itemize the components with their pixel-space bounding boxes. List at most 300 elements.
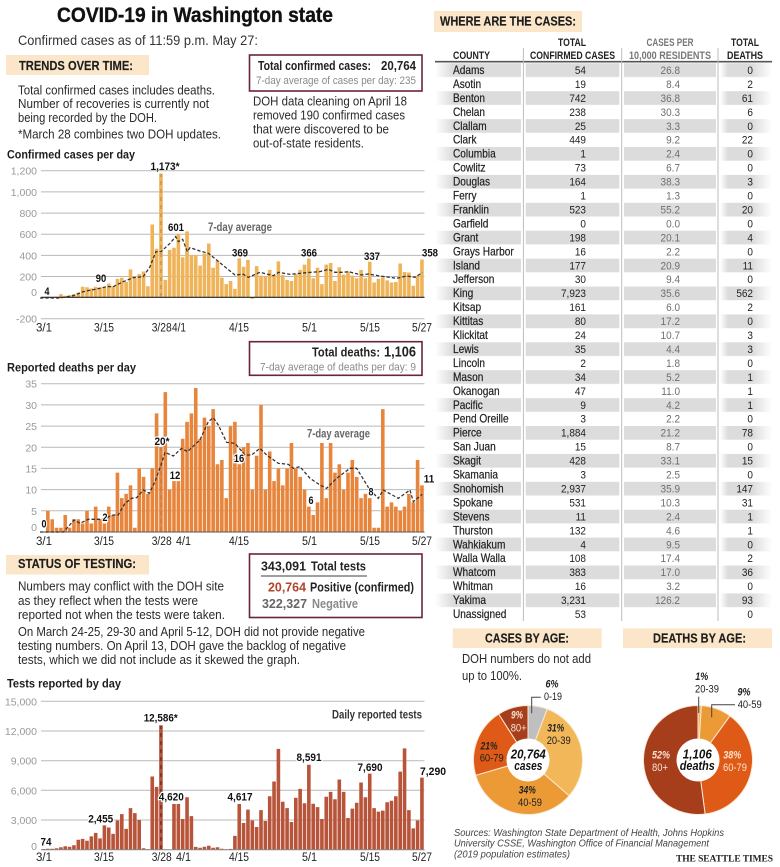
column: cases per 10,000 residents: 35.9 xyxy=(661,483,680,496)
callout: total confirmed cases: 7-day average of cases per day: 235 xyxy=(256,75,416,87)
text block: testing notes: reported not when the tests were taken. xyxy=(18,608,225,622)
column: total confirmed cases: 53 xyxy=(575,608,586,621)
title: COVID-19 in Washington state xyxy=(57,4,333,27)
bar chart: tests reported by day: 12,000 xyxy=(5,726,37,738)
column: county names: Unassigned xyxy=(453,608,506,621)
column: cases per 10,000 residents: 126.2 xyxy=(655,594,680,607)
column: county names: Skamania xyxy=(453,469,499,482)
x axis: tests dates: 4/1 xyxy=(176,852,191,864)
x axis: deaths dates: 3/15 xyxy=(94,536,114,548)
column: cases per 10,000 residents: 17.0 xyxy=(661,567,680,579)
text block: trends notes: *March 28 combines two DOH updates. xyxy=(18,128,221,142)
callout: testing totals: Total tests xyxy=(311,560,366,574)
x axis: tests dates: 5/15 xyxy=(360,852,380,864)
column: county names: Lewis xyxy=(453,343,479,356)
text block: DOH data cleaning note: removed 190 confirmed cases xyxy=(253,109,405,123)
column: county names: Yakima xyxy=(453,595,487,607)
column: county names: King xyxy=(453,288,473,300)
section heading: cases by age: CASES BY AGE: xyxy=(485,630,569,645)
column: total confirmed cases xyxy=(561,64,586,621)
donut chart: deaths by age: 80+ xyxy=(652,762,668,774)
bar chart: reported deaths per day: 0 xyxy=(31,522,37,534)
column: total deaths: 0 xyxy=(747,413,753,426)
donut chart: deaths by age: 40-59 xyxy=(738,699,762,711)
bar chart: reported deaths per day: 20 xyxy=(25,442,37,454)
value labels: cases: 337 xyxy=(364,251,380,263)
column: county names: Franklin xyxy=(453,204,489,217)
bar chart: confirmed cases per day xyxy=(11,161,438,335)
bar chart: tests reported by day: 9,000 xyxy=(11,756,37,768)
column: total deaths: 3 xyxy=(747,343,753,356)
column: county names: Pend Oreille xyxy=(453,413,509,426)
column: total deaths: 3 xyxy=(747,329,753,342)
column: county names: Grays Harbor xyxy=(453,246,514,259)
x axis: cases dates: 3/1 xyxy=(36,323,52,335)
annotation: 7-day average: 7-day average xyxy=(208,222,272,234)
column: total confirmed cases: 0 xyxy=(580,218,586,231)
donut chart: cases by age: 20,764 xyxy=(510,747,546,761)
column: county names: Kittitas xyxy=(453,316,484,328)
bar chart: confirmed cases per day: 1,000 xyxy=(11,187,37,199)
column: county names: Klickitat xyxy=(453,329,488,342)
bars: daily deaths xyxy=(42,388,424,532)
donut chart: deaths by age: 9% xyxy=(738,687,751,699)
table header: TOTAL xyxy=(558,37,586,49)
callout: total deaths: 1,106 xyxy=(384,345,416,361)
section heading: status of testing: STATUS OF TESTING: xyxy=(18,556,136,571)
column: cases per 10,000 residents: 2.2 xyxy=(666,413,680,426)
column: total confirmed cases: 108 xyxy=(569,553,586,565)
column: total deaths: 1 xyxy=(747,385,753,398)
column: total confirmed cases: 449 xyxy=(569,134,586,147)
donut chart: deaths by age: 1,106 xyxy=(683,747,713,761)
column: county names: Jefferson xyxy=(453,274,494,286)
x axis: deaths dates: 5/15 xyxy=(360,536,380,548)
callout: total confirmed cases: 20,764 xyxy=(381,59,416,73)
text block: testing notes: Numbers may conflict with the DOH site xyxy=(18,580,224,594)
column: county names: Clark xyxy=(453,134,477,147)
bars: daily confirmed cases xyxy=(42,174,424,299)
column: total deaths: 0 xyxy=(747,581,753,593)
value labels: deaths: 0 xyxy=(42,519,46,531)
table header: 10,000 RESIDENTS xyxy=(629,50,711,62)
column: county names: San Juan xyxy=(453,441,496,454)
text block: trends notes: being recorded by the DOH. xyxy=(18,111,157,125)
column: cases per 10,000 residents: 38.3 xyxy=(661,176,680,189)
section heading: trends over time xyxy=(6,55,149,75)
text block: testing notes: On March 24-25, 29-30 and April 5-12, DOH did not provide negative xyxy=(18,625,365,639)
column: total deaths: 22 xyxy=(742,134,753,147)
column: total deaths: 1 xyxy=(747,371,753,384)
column: total deaths: 147 xyxy=(736,483,753,496)
text block: DOH data cleaning note: that were discovered to be xyxy=(253,123,389,137)
table header: CASES PER xyxy=(646,37,694,49)
column: total confirmed cases: 24 xyxy=(575,329,586,342)
donut chart: cases by age: 31% xyxy=(547,723,564,735)
value labels: cases: 369 xyxy=(232,248,248,260)
x axis: tests dates: 3/15 xyxy=(94,852,114,864)
value labels: cases xyxy=(44,161,438,298)
column: county names: Mason xyxy=(453,371,483,384)
column: total confirmed cases: 3 xyxy=(580,413,586,426)
column: cases per 10,000 residents: 20.9 xyxy=(661,260,680,273)
value labels: cases: 90 xyxy=(96,273,106,285)
column: total deaths: 11 xyxy=(743,260,753,273)
column: cases per 10,000 residents: 1.3 xyxy=(666,190,680,203)
bar chart: confirmed cases per day: 800 xyxy=(19,208,37,220)
column: total deaths: 0 xyxy=(747,148,753,161)
column: total deaths: 4 xyxy=(747,232,753,245)
column: total confirmed cases: 7,923 xyxy=(561,288,586,300)
x axis: tests dates: 5/27 xyxy=(412,852,432,864)
x axis: deaths dates xyxy=(36,536,432,548)
value labels: tests xyxy=(40,712,446,849)
bar chart: tests reported by day: 0 xyxy=(31,841,37,853)
column: total deaths: 0 xyxy=(747,441,753,454)
callout: total confirmed cases: Total confirmed cases: xyxy=(258,59,371,73)
value labels: deaths: 12 xyxy=(170,470,180,482)
column: total deaths: 93 xyxy=(742,594,753,607)
column: total deaths: 61 xyxy=(742,92,753,105)
column: cases per 10,000 residents: 5.2 xyxy=(666,371,680,384)
x axis: tests dates xyxy=(36,852,432,864)
column: cases per 10,000 residents: 3.2 xyxy=(666,581,680,593)
section heading: cases by age xyxy=(453,628,602,648)
column: cases per 10,000 residents: 55.2 xyxy=(661,204,680,217)
column: county names: Asotin xyxy=(453,78,481,91)
callout: total confirmed cases xyxy=(250,55,422,91)
credit: The Seattle Times: THE SEATTLE TIMES xyxy=(676,855,773,865)
text block: trends notes xyxy=(18,83,221,142)
column: total confirmed cases: 161 xyxy=(569,302,586,314)
table: cases by county xyxy=(435,37,772,621)
x axis: deaths dates: 3/28 xyxy=(152,536,172,548)
value labels: deaths: 11 xyxy=(424,474,434,486)
bar chart: reported deaths per day xyxy=(25,379,434,548)
bar chart: confirmed cases per day: 0 xyxy=(31,287,37,299)
column: county names: Island xyxy=(453,260,480,272)
column: county names: Okanogan xyxy=(453,385,500,398)
section heading: status of testing xyxy=(6,555,149,574)
value labels: tests: 4,620 xyxy=(159,792,184,804)
column: county names: Adams xyxy=(453,64,485,77)
column: total deaths xyxy=(736,64,753,621)
column: total deaths: 1 xyxy=(747,511,753,524)
column: county names: Walla Walla xyxy=(453,553,507,565)
text block: trends notes: Total confirmed cases includes deaths. xyxy=(18,83,215,97)
column: total deaths: 78 xyxy=(742,427,753,440)
column: county names: Douglas xyxy=(453,176,491,189)
x axis: deaths dates: 4/1 xyxy=(176,536,191,548)
column: cases per 10,000 residents: 2.5 xyxy=(666,469,680,482)
donut chart: cases by age: 80+ xyxy=(511,722,527,734)
callout: total deaths: Total deaths: xyxy=(312,346,380,360)
x axis: tests dates: 4/15 xyxy=(229,852,249,864)
bar chart: confirmed cases per day: -200 xyxy=(16,314,37,326)
x axis: tests dates: 5/1 xyxy=(302,852,317,864)
value labels: tests: 74 xyxy=(40,837,52,849)
column: county names: Columbia xyxy=(453,148,497,161)
chart heading: tests reported by day: Tests reported by day xyxy=(7,677,121,691)
column: county names: Lincoln xyxy=(453,357,485,370)
column: total confirmed cases: 15 xyxy=(575,441,586,454)
column: total deaths: 0 xyxy=(747,162,753,175)
column: total confirmed cases: 54 xyxy=(575,64,586,77)
column: cases per 10,000 residents: 26.8 xyxy=(661,64,680,77)
value labels: tests: 12,586* xyxy=(144,712,178,724)
table header xyxy=(435,37,772,621)
column: county names: Kitsap xyxy=(453,302,481,314)
column: total confirmed cases: 164 xyxy=(569,176,586,189)
column: total deaths: 0 xyxy=(747,274,753,286)
column: total deaths: 36 xyxy=(742,567,753,579)
column: cases per 10,000 residents: 6.7 xyxy=(666,162,680,175)
donut chart: cases by age: 9% xyxy=(511,710,523,722)
column: county names: Snohomish xyxy=(453,483,504,496)
text block: DOH data cleaning note: out-of-state residents. xyxy=(253,137,364,151)
column: total confirmed cases: 3,231 xyxy=(561,594,586,607)
value labels: tests: 7,290 xyxy=(420,766,446,778)
column: total confirmed cases: 198 xyxy=(569,232,586,245)
donut chart: deaths by age xyxy=(643,671,762,814)
column: cases per 10,000 residents: 4.4 xyxy=(666,343,680,356)
column: total deaths: 2 xyxy=(747,553,753,565)
x axis: cases dates: 5/1 xyxy=(302,323,317,335)
x axis: deaths dates: 5/27 xyxy=(412,536,432,548)
value labels: cases: 1,173* xyxy=(150,161,180,173)
column: total deaths: 6 xyxy=(747,106,753,119)
column: cases per 10,000 residents: 8.4 xyxy=(666,78,680,91)
column: total confirmed cases: 238 xyxy=(569,106,586,119)
donut chart: cases by age: 40-59 xyxy=(518,797,542,809)
column: total deaths: 0 xyxy=(747,120,753,133)
text block: sources: (2019 population estimates) xyxy=(454,848,570,860)
x axis: cases dates: 4/15 xyxy=(229,323,249,335)
x axis: tests dates: 3/28 xyxy=(152,852,172,864)
donut chart: deaths by age: 20-39 xyxy=(695,684,719,696)
bar chart: tests reported by day xyxy=(5,696,446,864)
column: total confirmed cases: 35 xyxy=(575,343,586,356)
column: cases per 10,000 residents: 17.2 xyxy=(661,315,680,328)
annotation: daily reported tests: Daily reported tests xyxy=(332,709,422,721)
x axis: cases dates: 5/15 xyxy=(360,323,380,335)
donut chart: cases by age: 20-39 xyxy=(547,735,571,747)
column: total confirmed cases: 9 xyxy=(580,399,586,412)
donut chart: deaths by age: 52% xyxy=(652,749,670,761)
column: cases per 10,000 residents: 0.0 xyxy=(666,218,680,231)
callout: testing totals: 20,764 xyxy=(268,581,306,595)
bar chart: reported deaths per day: 30 xyxy=(25,400,37,412)
donut chart: deaths by age: 1% xyxy=(695,671,708,683)
bar chart: tests reported by day: 3,000 xyxy=(11,815,37,827)
column: total deaths: 31 xyxy=(742,497,753,510)
value labels: cases: 358 xyxy=(422,248,438,260)
column: total confirmed cases: 1 xyxy=(580,148,586,161)
donut chart: cases by age: 0-19 xyxy=(544,691,562,703)
column: cases per 10,000 residents: 17.4 xyxy=(661,553,680,565)
column: county names: Cowlitz xyxy=(453,162,486,175)
callout: testing totals: 322,327 xyxy=(262,597,307,611)
column: total confirmed cases: 531 xyxy=(569,497,586,510)
column: cases per 10,000 residents: 9.4 xyxy=(666,274,680,286)
column: total confirmed cases: 742 xyxy=(569,92,586,105)
callout: testing totals: Positive (confirmed) xyxy=(310,581,414,595)
section heading: deaths by age xyxy=(623,628,772,648)
bar chart: confirmed cases per day: 200 xyxy=(19,272,37,284)
text block: age note: DOH numbers do not add xyxy=(462,652,591,666)
callout: total deaths: 7-day average of deaths per day: 9 xyxy=(260,362,416,374)
column: cases per 10,000 residents: 2.4 xyxy=(666,511,680,524)
column: total deaths: 2 xyxy=(747,78,753,91)
table header: TOTAL xyxy=(731,37,759,49)
column: cases per 10,000 residents: 20.1 xyxy=(661,232,680,245)
column: cases per 10,000 residents xyxy=(655,64,680,607)
column: total deaths: 562 xyxy=(736,288,753,300)
text block: sources: Sources: Washington State Department of Health, Johns Hopkins xyxy=(454,827,725,839)
column: county names: Whatcom xyxy=(453,567,496,579)
column: total deaths: 0 xyxy=(747,608,753,621)
value labels: tests: 7,690 xyxy=(358,762,382,774)
donut chart: deaths by age: 38% xyxy=(723,749,741,761)
donut chart: deaths by age: deaths xyxy=(680,759,715,773)
text block: sources: University CSSE, Washington Office of Financial Management xyxy=(454,838,710,850)
value labels: tests: 2,455 xyxy=(88,814,113,826)
x axis: cases dates: 3/15 xyxy=(94,323,114,335)
text block: sources xyxy=(454,827,725,860)
value labels: tests: 8,591 xyxy=(296,752,322,764)
bar chart: reported deaths per day: 25 xyxy=(25,421,37,433)
x axis: cases dates: 5/27 xyxy=(412,323,432,335)
column: county names: Whitman xyxy=(453,581,493,593)
column: county names: Spokane xyxy=(453,497,493,510)
x axis: deaths dates: 5/1 xyxy=(302,536,317,548)
bars: daily tests xyxy=(42,725,424,850)
column: county names: Pierce xyxy=(453,427,482,440)
column: total confirmed cases: 11 xyxy=(576,511,586,524)
donut chart: deaths by age: 60-79 xyxy=(723,762,747,774)
table header: CONFIRMED CASES xyxy=(530,50,615,62)
bar chart: confirmed cases per day: 1,200 xyxy=(11,166,37,178)
column: total confirmed cases: 2,937 xyxy=(561,483,586,496)
column: total confirmed cases: 73 xyxy=(575,162,586,175)
column: total deaths: 0 xyxy=(747,315,753,328)
x axis: deaths dates: 3/1 xyxy=(36,536,52,548)
bar chart: reported deaths per day: 5 xyxy=(31,506,37,518)
column: county names: Garfield xyxy=(453,218,488,231)
bar chart: tests reported by day: 15,000 xyxy=(5,696,37,708)
value labels: cases: 366 xyxy=(301,248,317,260)
bar chart: tests reported by day: 6,000 xyxy=(11,785,37,797)
value labels: deaths: 16 xyxy=(234,453,244,465)
x axis: cases dates: 3/28 xyxy=(152,323,172,335)
value labels: cases: 4 xyxy=(44,286,50,298)
column: total confirmed cases: 428 xyxy=(569,455,586,468)
value labels: deaths: 8 xyxy=(368,487,374,499)
column: cases per 10,000 residents: 9.5 xyxy=(666,539,680,552)
column: cases per 10,000 residents: 10.7 xyxy=(661,329,680,342)
bar chart: confirmed cases per day: 600 xyxy=(19,229,37,241)
column: county names xyxy=(453,64,514,621)
donut chart: cases by age: 60-79 xyxy=(480,753,504,765)
chart heading: confirmed cases per day: Confirmed cases per day xyxy=(7,147,135,161)
column: total deaths: 2 xyxy=(747,302,753,314)
column: county names: Chelan xyxy=(453,106,485,119)
column: cases per 10,000 residents: 3.3 xyxy=(666,120,680,133)
column: total confirmed cases: 30 xyxy=(575,274,586,286)
column: total confirmed cases: 132 xyxy=(569,525,586,538)
column: total confirmed cases: 177 xyxy=(569,260,586,273)
column: total confirmed cases: 1,884 xyxy=(561,427,586,440)
column: cases per 10,000 residents: 2.2 xyxy=(666,246,680,259)
line: 7-day average of cases xyxy=(40,237,422,298)
column: total confirmed cases: 19 xyxy=(575,78,586,91)
column: total confirmed cases: 16 xyxy=(575,246,586,259)
column: total confirmed cases: 2 xyxy=(580,357,586,370)
value labels: deaths xyxy=(42,436,434,531)
chart heading: reported deaths per day: Reported deaths per day xyxy=(7,361,136,375)
column: county names: Ferry xyxy=(453,190,477,203)
bar chart: reported deaths per day: 15 xyxy=(25,463,37,475)
text block: testing notes: tests, which we did not include as it skewed the graph. xyxy=(18,653,300,667)
column: total deaths: 0 xyxy=(747,218,753,231)
text block: DOH data cleaning note: DOH data cleaning on April 18 xyxy=(253,95,407,109)
column: total confirmed cases: 4 xyxy=(580,539,586,552)
column: total deaths: 3 xyxy=(747,176,753,189)
x axis: cases dates xyxy=(36,323,432,335)
column: cases per 10,000 residents: 4.2 xyxy=(666,399,680,412)
column: total confirmed cases: 3 xyxy=(580,469,586,482)
text block: age note: up to 100%. xyxy=(462,669,522,683)
callout: testing totals: Negative xyxy=(312,597,358,611)
column: total confirmed cases: 1 xyxy=(580,190,586,203)
column: total confirmed cases: 80 xyxy=(575,315,586,328)
donut chart: cases by age: cases xyxy=(514,759,542,773)
callout: total deaths xyxy=(250,342,422,375)
value labels: deaths: 2 xyxy=(102,512,108,524)
value labels: tests: 4,617 xyxy=(228,792,252,804)
table stripes xyxy=(435,63,772,621)
column: total deaths: 0 xyxy=(747,469,753,482)
bar chart: confirmed cases per day: 400 xyxy=(19,250,37,262)
callout: testing totals xyxy=(250,554,422,618)
donut chart: cases by age: 21% xyxy=(480,740,498,752)
column: cases per 10,000 residents: 36.8 xyxy=(661,92,680,105)
bar chart: reported deaths per day: 10 xyxy=(25,485,37,497)
line: 7-day average of deaths xyxy=(40,418,422,532)
value labels: cases: 601 xyxy=(168,222,184,234)
column: total confirmed cases: 523 xyxy=(569,204,586,217)
column: county names: Thurston xyxy=(453,525,493,538)
column: total deaths: 0 xyxy=(747,357,753,370)
column: cases per 10,000 residents: 35.6 xyxy=(661,288,680,300)
column: total deaths: 1 xyxy=(747,525,753,538)
column: total deaths: 0 xyxy=(747,64,753,77)
column: total confirmed cases: 16 xyxy=(575,581,586,593)
text block: testing notes xyxy=(18,580,365,667)
column: county names: Grant xyxy=(453,232,478,245)
value labels: deaths: 20* xyxy=(154,436,170,448)
column: cases per 10,000 residents: 6.0 xyxy=(666,302,680,314)
column: county names: Skagit xyxy=(453,455,481,468)
column: cases per 10,000 residents: 8.7 xyxy=(666,441,680,454)
column: cases per 10,000 residents: 9.2 xyxy=(666,134,680,147)
column: county names: Clallam xyxy=(453,120,487,133)
table header: DEATHS xyxy=(727,50,763,62)
section heading: deaths by age: DEATHS BY AGE: xyxy=(653,630,746,645)
text block: DOH data cleaning note xyxy=(253,95,407,151)
section heading: where are the cases xyxy=(434,11,582,32)
column: total confirmed cases: 383 xyxy=(569,567,586,579)
